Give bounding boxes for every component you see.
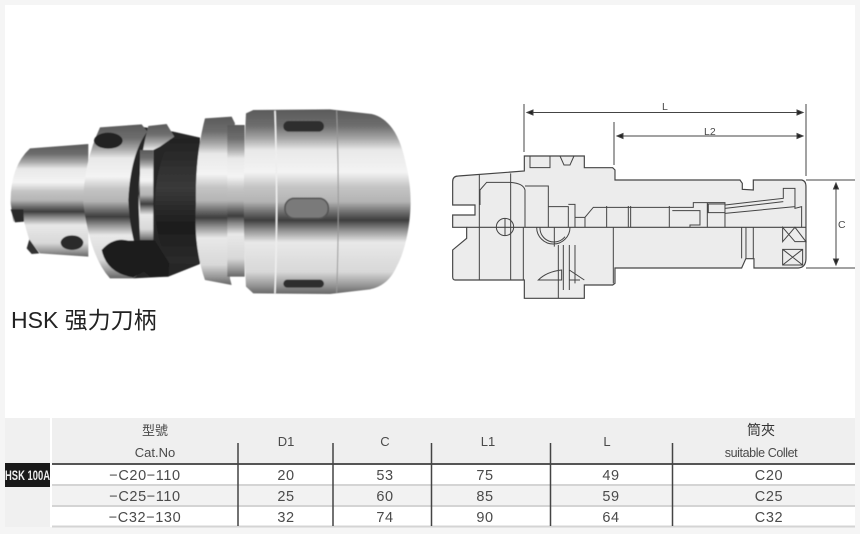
column rules: [238, 443, 672, 526]
row C32: 32: [277, 510, 295, 526]
header labels: suitable Collet: [725, 446, 798, 460]
dimension labels: C: [838, 219, 846, 231]
row C25: −C25−110: [109, 489, 181, 505]
row C25: 59: [602, 489, 620, 505]
row C20: 20: [277, 468, 295, 484]
drawing outline: [453, 156, 806, 298]
bottom slot: [283, 280, 324, 288]
row C32: 64: [602, 510, 620, 526]
row C32: 90: [476, 510, 494, 526]
row C25: 25: [277, 489, 295, 505]
technical section drawing: [453, 156, 806, 298]
row C32: 74: [376, 510, 394, 526]
flange notch: [102, 240, 169, 277]
middle slot: [285, 198, 328, 218]
black collar: [155, 138, 200, 264]
header labels: Cat.No: [135, 445, 175, 460]
product photo: HSK tool holder: [11, 109, 411, 294]
specification table: [5, 418, 855, 528]
ring: [195, 117, 235, 285]
dimension labels: L2: [704, 126, 716, 138]
header labels: L: [603, 434, 611, 449]
flange: [83, 124, 147, 278]
row C20: C20: [755, 468, 783, 484]
row C20: [109, 468, 783, 484]
left label column: [5, 418, 50, 527]
shank hole: [61, 235, 83, 250]
header labels: L1: [481, 434, 495, 449]
dimension labels: [662, 101, 846, 231]
product title: HSK 强力刀柄: [11, 307, 157, 333]
rows: [52, 485, 855, 506]
top slot: [283, 121, 324, 132]
upper internal section: [479, 156, 802, 280]
row C25: 60: [376, 489, 394, 505]
header labels: D1: [278, 434, 294, 449]
groove ring: [138, 124, 174, 240]
series label: HSK 100A: [5, 468, 50, 483]
row C20: 75: [476, 468, 494, 484]
flange top hole: [94, 133, 123, 149]
header labels: 筒夾: [747, 422, 775, 438]
dimension L2: [617, 134, 803, 138]
centre line: [467, 226, 806, 229]
dimension labels: L: [662, 101, 668, 113]
series label: [5, 463, 50, 487]
taper shank: [11, 144, 88, 257]
row C32: −C32−130: [109, 510, 181, 526]
main body: [244, 109, 411, 294]
lower internal section: [537, 227, 806, 298]
dimension lines: [524, 104, 855, 268]
row C25: [109, 489, 783, 505]
dimension C: [834, 183, 838, 265]
header band: [52, 418, 855, 463]
header labels: C: [380, 434, 390, 449]
row C25: C25: [755, 489, 783, 505]
row C20: 49: [602, 468, 620, 484]
dark silhouette backing: [127, 127, 200, 278]
row C20: 53: [376, 468, 394, 484]
dimension L: [527, 110, 803, 115]
row C32: [109, 510, 783, 526]
header labels: [135, 422, 798, 460]
neck: [227, 125, 245, 277]
row C32: C32: [755, 510, 783, 526]
header labels: 型號: [142, 423, 168, 438]
row C25: 85: [476, 489, 494, 505]
row C20: −C20−110: [109, 468, 181, 484]
